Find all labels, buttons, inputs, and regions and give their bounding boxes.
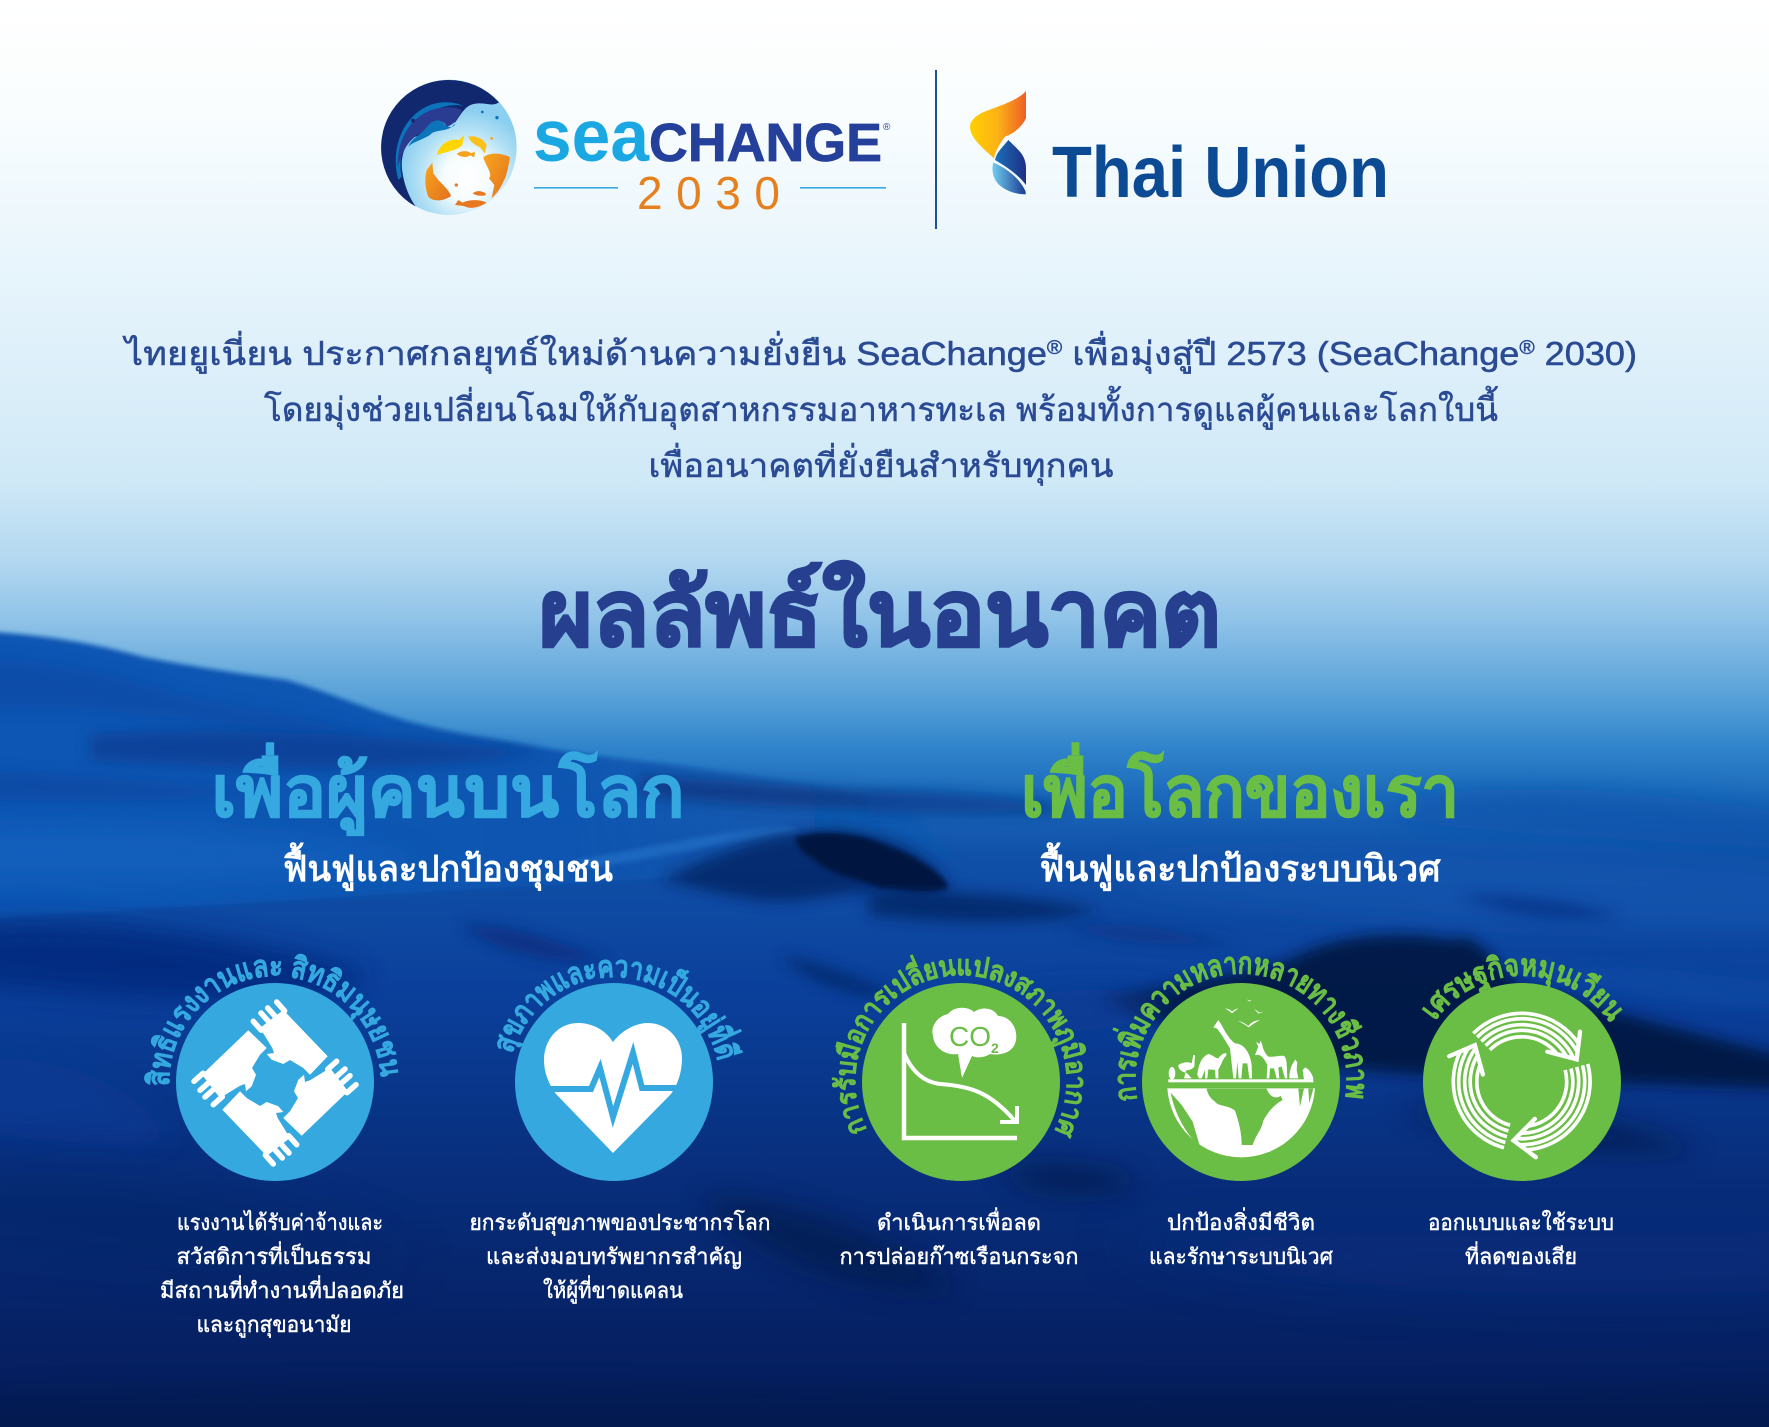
heading: for the planet: เพื่อโลกของเรา (1021, 742, 1459, 831)
arc label: labour rights: สิทธิแรงงานและ สิทธิมนุษยชน (144, 954, 398, 1085)
wordmark: sea CHANGE: sea (533, 96, 650, 177)
caption: และรักษาระบบนิเวศ (1149, 1244, 1333, 1269)
wordmark: 2030: 2030 (637, 167, 780, 219)
caption: ยกระดับสุขภาพของประชากรโลก (470, 1210, 770, 1236)
logo: SeaChange 2030: CHANGE (649, 113, 882, 173)
panel: circular economy (1422, 954, 1622, 1269)
heading: for people: เพื่อผู้คนบนโลก (212, 742, 684, 836)
wordmark: Thai Union: Thai Union (1052, 133, 1389, 213)
intro paragraph (122, 331, 1637, 486)
caption (1428, 1210, 1614, 1269)
caption: การปล่อยก๊าซเรือนกระจก (840, 1244, 1078, 1269)
heading: for people: ฟื้นฟูและปกป้องชุมชน (283, 842, 613, 892)
icon: recycle arrows (1433, 1013, 1605, 1166)
caption: ดำเนินการเพื่อลด (877, 1207, 1041, 1235)
icon: CO2 declining chart: 2 (991, 1040, 999, 1056)
caption: มีสถานที่ทำงานที่ปลอดภัย (160, 1275, 404, 1303)
icon: four hands (194, 1002, 356, 1164)
panel: climate action (832, 954, 1086, 1269)
caption (1149, 1207, 1333, 1269)
caption: ที่ลดของเสีย (1465, 1241, 1577, 1269)
main title: ผลลัพธ์ในอนาคต (539, 561, 1221, 665)
caption (160, 1210, 404, 1338)
arc label: biodiversity: การเพิ่มความหลากหลายทางชีวภาพ (1112, 956, 1364, 1101)
heading: for the planet (1021, 742, 1459, 892)
arc label: health: สุขภาพและความเป็นอยู่ที่ดี (497, 960, 743, 1060)
caption: และถูกสุขอนามัย (196, 1312, 352, 1338)
intro paragraph: โดยมุ่งช่วยเปลี่ยนโฉมให้กับอุตสาหกรรมอาหารทะเล พร้อมทั้งการดูแลผู้คนและโลกใบนี้ (264, 386, 1499, 430)
caption: ปกป้องสิ่งมีชีวิต (1167, 1207, 1315, 1235)
intro paragraph: ไทยยูเนี่ยน ประกาศกลยุทธ์ใหม่ด้านความยั่งยืน SeaChange (125, 335, 968, 372)
panel: biodiversity (1112, 956, 1364, 1269)
icon: globe with wave and fish (381, 80, 517, 215)
caption: ให้ผู้ที่ขาดแคลน (543, 1275, 683, 1304)
caption: แรงงานได้รับค่าจ้างและ (177, 1210, 383, 1235)
rippled crest and rock-like wave (574, 826, 950, 901)
arc label: climate: การรับมือการเปลี่ยนแปลงสภาพภูมิอากาศ (832, 954, 1086, 1140)
background: ocean waves (0, 630, 1769, 1427)
logo: Thai Union (970, 91, 1389, 213)
heading: for the planet: ฟื้นฟูและปกป้องระบบนิเวศ (1040, 842, 1442, 892)
icon: CO2 declining chart: CO (949, 1021, 991, 1052)
intro paragraph: ® (1047, 338, 1062, 359)
intro paragraph: เพื่ออนาคตที่ยั่งยืนสำหรับทุกคน (648, 443, 1114, 486)
intro paragraph: ® (1519, 338, 1535, 359)
intro paragraph: 2030) (1535, 335, 1637, 372)
arc label: circular economy: เศรษฐกิจหมุนเวียน (1422, 954, 1622, 1022)
animals (1213, 1020, 1252, 1078)
icon: flame (970, 91, 1026, 194)
caption (470, 1210, 770, 1304)
panel: labour and human rights (144, 954, 404, 1338)
icon: earth and animals (1167, 999, 1315, 1157)
intro paragraph: เพื่อมุ่งสู่ปี 2573 (SeaChange (1062, 331, 1519, 374)
caption: สวัสดิการที่เป็นธรรม (176, 1241, 372, 1269)
heading: for people (212, 742, 684, 892)
caption: และส่งมอบทรัพยากรสำคัญ (486, 1244, 742, 1269)
logo: SeaChange 2030: ® (883, 122, 891, 133)
panel: health and wellbeing (470, 960, 770, 1304)
icon: CO2 declining chart (904, 1008, 1017, 1138)
logo: SeaChange 2030 (381, 80, 891, 219)
icon: heart with pulse (540, 1023, 686, 1153)
caption (840, 1207, 1078, 1269)
caption: ออกแบบและใช้ระบบ (1428, 1210, 1614, 1235)
